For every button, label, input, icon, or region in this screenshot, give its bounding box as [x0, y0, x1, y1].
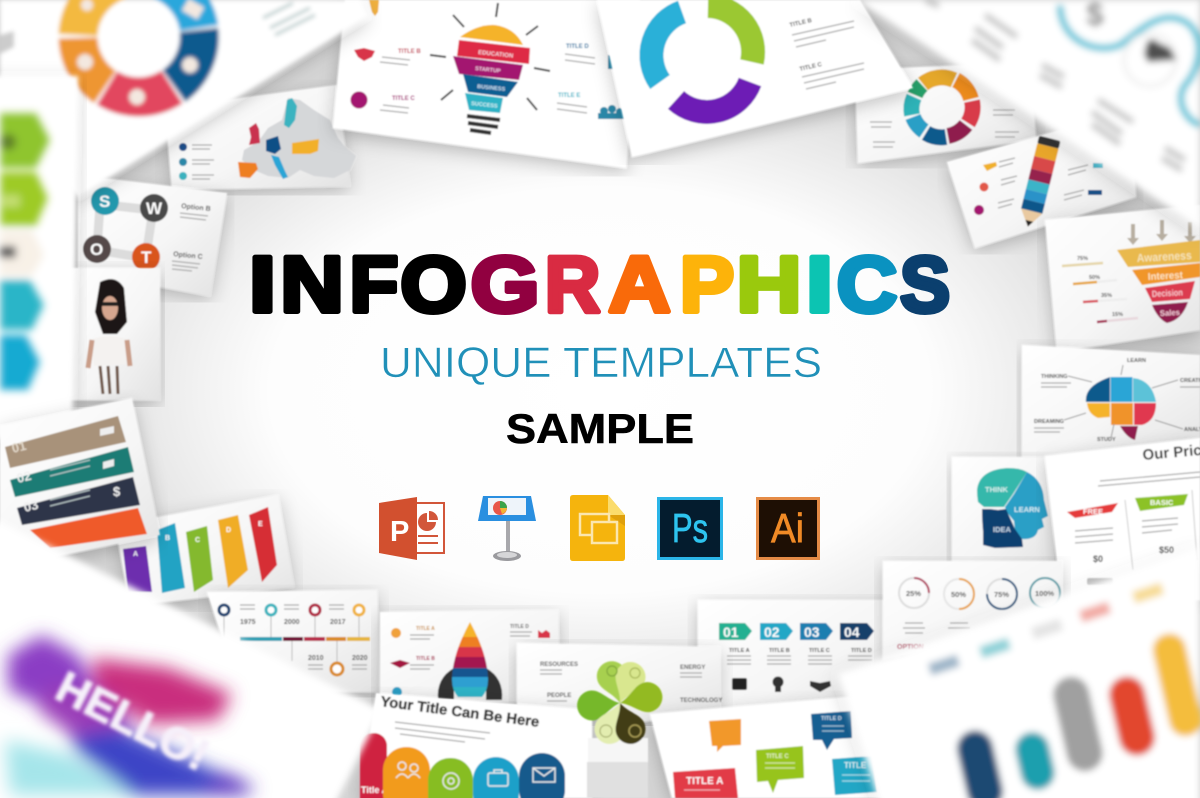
panel: pricing slide — [1045, 438, 1200, 606]
panel: pencil slide — [947, 110, 1136, 248]
panel: portrait slide — [68, 268, 160, 400]
text: title blocks: TITLE C — [799, 62, 823, 73]
numbered ribbons: 01 — [10, 438, 28, 456]
icon: Keynote — [478, 496, 536, 561]
percent rings: 100% — [1035, 589, 1055, 598]
icon: layered lightbulb: BUSINESS — [477, 84, 506, 93]
funnel chart: Decision — [1152, 287, 1183, 299]
text: resources and people: RESOURCES — [540, 662, 578, 668]
brush columns: A — [133, 551, 138, 558]
funnel chart: Awareness — [1137, 250, 1192, 265]
donut chart — [78, 0, 199, 97]
text: sub-lines — [395, 722, 490, 742]
numbered step columns: TITLE D — [851, 648, 872, 654]
panel: speech bubbles slide — [650, 696, 900, 798]
panel: SWOT slide — [78, 175, 227, 296]
SWOT circles — [83, 187, 168, 271]
panel: numbered ribbons slide — [0, 398, 160, 562]
brush ring chart — [651, 6, 753, 112]
title: H — [736, 240, 802, 328]
panel: rocket slide — [380, 610, 560, 702]
numbered step columns: TITLE C — [809, 648, 830, 654]
timeline: 2010 — [308, 655, 324, 662]
numbered ribbons: 02 — [15, 468, 33, 486]
teal curve chart — [1060, 5, 1200, 125]
panel: percent circles slide — [883, 561, 1062, 660]
title: R — [545, 241, 600, 329]
progress bars: 75% — [1077, 256, 1088, 262]
brain labels: DREAMING — [1034, 419, 1064, 425]
text: resources and people — [540, 662, 722, 704]
numbered step columns — [719, 623, 874, 692]
panel: numbered steps slide — [698, 600, 900, 720]
SWOT circles: S — [99, 192, 110, 211]
pricing columns: $0 — [1093, 554, 1103, 564]
head silhouette: IDEA — [993, 525, 1012, 534]
panel: lightbulb slide — [333, 0, 640, 168]
heading: your title: Your Title Can Be Here — [379, 694, 540, 731]
icon pills row — [360, 733, 565, 798]
rocket labels: TITLE B — [416, 656, 435, 662]
text: title blocks: TITLE B — [789, 18, 813, 29]
rocket labels: TITLE D — [510, 624, 529, 630]
panel: flower slide — [517, 643, 722, 722]
timeline — [219, 605, 370, 675]
speech bubbles: TITLE A — [686, 776, 723, 787]
progress bars — [1062, 256, 1138, 322]
icon: layered lightbulb: EDUCATION — [478, 50, 513, 60]
numbered step columns: 02 — [764, 624, 780, 640]
text: options — [172, 203, 211, 271]
brain labels — [1034, 358, 1200, 443]
icons and labels — [974, 158, 1103, 215]
panel: brain puzzle slide — [1022, 345, 1200, 458]
panel: blurred top-right slide — [857, 0, 1200, 228]
funnel chart: Interest — [1148, 270, 1184, 283]
callout: left titles — [350, 0, 421, 113]
title: I — [249, 240, 276, 328]
brush columns: B — [165, 535, 170, 542]
panel: donut slide — [0, 0, 368, 197]
funnel chart — [1117, 220, 1200, 323]
speech bubbles — [673, 711, 877, 798]
text: options: Option C — [173, 251, 203, 261]
flower petals — [576, 657, 665, 748]
timeline: 2017 — [330, 619, 346, 626]
numbered ribbons — [5, 416, 147, 548]
SWOT circles: W — [146, 199, 163, 218]
blurred icons and text — [925, 0, 1185, 170]
progress bars: 35% — [1101, 293, 1112, 299]
brush columns: D — [226, 527, 231, 534]
numbered step columns: 03 — [804, 624, 820, 640]
callout: left titles: TITLE C — [392, 96, 415, 102]
panel: blurred HELLO slide — [0, 512, 382, 798]
icon: layered lightbulb — [430, 3, 550, 133]
rocket chart — [438, 620, 502, 700]
panel: funnel slide — [1045, 205, 1200, 352]
timeline: 2020 — [352, 655, 368, 662]
text: resources and people: PEOPLE — [547, 693, 571, 699]
title: F — [350, 240, 398, 328]
title: G — [471, 240, 539, 328]
brain labels: STUDY — [1097, 437, 1116, 443]
percent rings: 75% — [994, 590, 1009, 599]
title — [249, 240, 950, 329]
icon: Photoshop: Ps — [672, 505, 708, 551]
numbered ribbons: $ — [113, 484, 121, 499]
icon: Illustrator — [758, 498, 818, 558]
progress bars: 15% — [1112, 312, 1123, 318]
icon: layered lightbulb: STARTUP — [475, 66, 501, 75]
timeline: 2000 — [284, 619, 300, 626]
text: options: Option B — [181, 203, 211, 213]
head silhouette: LEARN — [1014, 505, 1040, 514]
map of Europe — [179, 98, 356, 180]
icon: Illustrator: Ai — [771, 505, 804, 551]
speech bubbles: TITLE D — [821, 716, 842, 722]
pricing columns: BASIC — [1150, 498, 1174, 507]
brain labels: THINKING — [1041, 374, 1068, 380]
numbered step columns: TITLE B — [769, 648, 790, 654]
stacked hexagon tabs — [0, 113, 50, 390]
subtitle: UNIQUE TEMPLATES — [380, 339, 822, 387]
title: S — [900, 241, 950, 329]
panel: blurred left slide — [0, 76, 78, 440]
numbered step columns: 04 — [844, 624, 860, 640]
callout: right titles — [557, 44, 626, 119]
title: O — [400, 241, 467, 329]
watercolor splash — [5, 635, 255, 795]
progress bars: 50% — [1089, 275, 1100, 281]
percent rings: 25% — [906, 589, 921, 598]
head silhouette — [977, 468, 1048, 548]
brush columns: E — [258, 521, 263, 528]
speech bubbles: TITLE C — [766, 754, 789, 760]
panel: brush circle slide — [597, 0, 913, 157]
puzzle brain — [1086, 377, 1156, 440]
panel: brush columns slide — [115, 495, 294, 606]
panel: title card slide — [360, 693, 592, 798]
speech bubbles: TITLE — [844, 761, 867, 770]
brain labels: LEARN — [1127, 358, 1146, 364]
title: N — [280, 240, 344, 329]
timeline: 1975 — [240, 619, 256, 626]
panel: wheel slide — [855, 62, 1036, 163]
pricing columns: FREE — [1083, 507, 1103, 516]
icon: layered lightbulb: SUCCESS — [471, 101, 498, 110]
percent rings: 50% — [951, 590, 966, 599]
icon: Photoshop — [658, 498, 722, 558]
pill bars — [928, 583, 1200, 798]
icon: PowerPoint — [379, 497, 444, 560]
rocket labels — [390, 624, 550, 697]
title: I — [806, 240, 833, 328]
SWOT circles: T — [141, 248, 152, 267]
percent rings — [899, 578, 1060, 609]
panel: blurred pill chart slide — [838, 547, 1200, 798]
text: resources and people: TECHNOLOGY — [680, 698, 722, 704]
SWOT circles: O — [90, 240, 103, 259]
sample label: SAMPLE — [506, 405, 694, 452]
option label: OPTION — [897, 644, 924, 651]
pencil chart — [1017, 136, 1061, 229]
title: C — [837, 241, 897, 329]
panel: head slide — [952, 457, 1055, 565]
brush columns — [123, 507, 277, 593]
title: P — [680, 240, 734, 328]
rocket labels: TITLE A — [416, 626, 435, 632]
heading: hello: HELLO! — [48, 662, 217, 780]
panel: flower chart — [576, 657, 665, 798]
icon: Google Slides — [570, 495, 625, 561]
wheel diagram — [911, 77, 973, 137]
head silhouette: THINK — [985, 485, 1008, 494]
pricing columns — [1067, 490, 1197, 585]
text: resources and people: ENERGY — [680, 665, 705, 671]
callout: right titles: TITLE D — [566, 44, 589, 50]
funnel chart: Sales — [1160, 308, 1181, 318]
title: A — [608, 240, 671, 329]
panel: Europe map slide — [165, 85, 356, 190]
numbered step columns: 01 — [723, 624, 739, 640]
panel: timeline slide — [207, 590, 380, 692]
text: title blocks — [789, 18, 864, 89]
callout: left titles: TITLE B — [398, 49, 421, 55]
icon pills row: Title A — [361, 785, 389, 795]
callout: right titles: TITLE E — [558, 93, 580, 99]
pricing columns: $50 — [1159, 545, 1174, 555]
icon: PowerPoint: P — [390, 516, 409, 548]
numbered step columns: TITLE A — [729, 648, 750, 654]
portrait photo — [88, 279, 130, 394]
brush columns: C — [195, 537, 200, 544]
numbered ribbons: 03 — [22, 497, 40, 515]
